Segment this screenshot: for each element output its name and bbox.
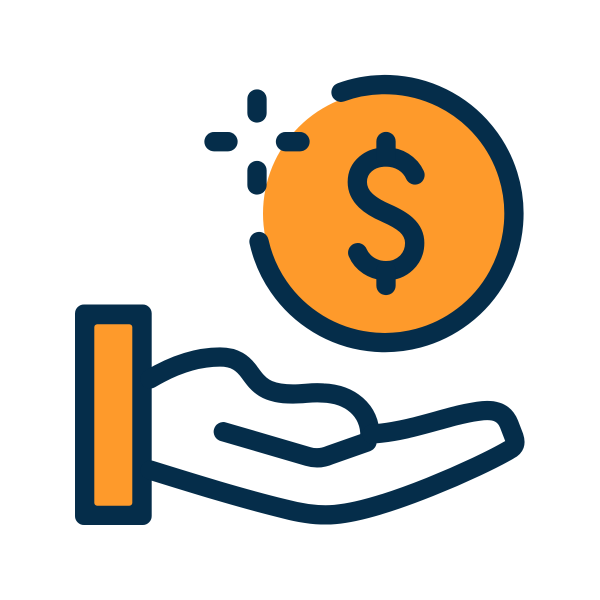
icon: sleeve cuff: [75, 304, 152, 525]
icon: sparkle: [214, 99, 300, 185]
icon: coin: [259, 85, 514, 343]
icon: dollar sign: [357, 142, 415, 286]
icon: open hand: [150, 357, 515, 515]
